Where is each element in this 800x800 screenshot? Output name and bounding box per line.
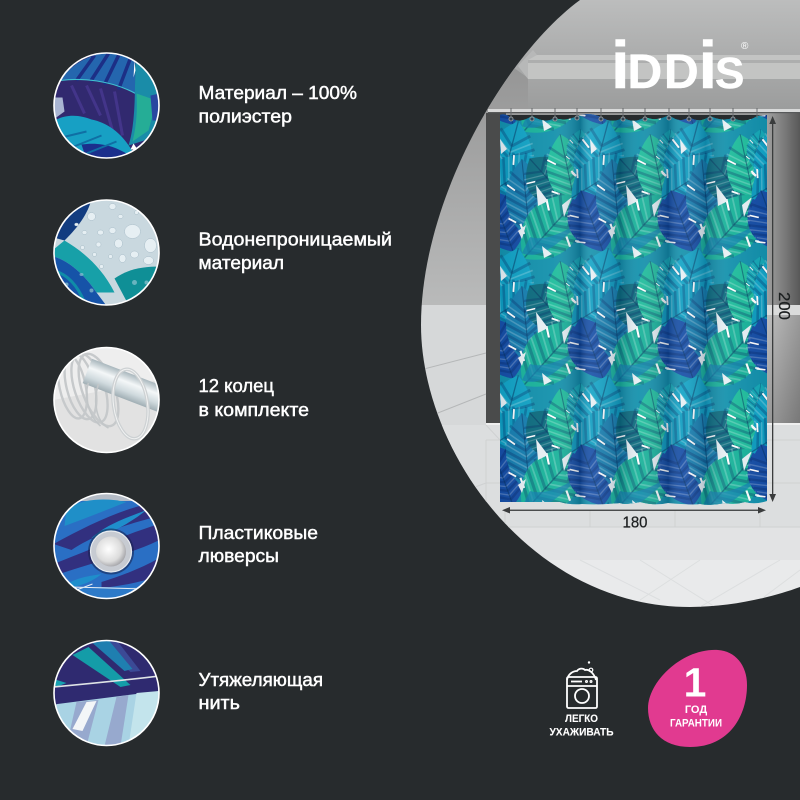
warranty badge xyxy=(648,650,747,747)
width dimension arrow xyxy=(502,507,766,514)
caption: weighted thread: Утяжеляющая xyxy=(198,670,323,690)
circle border xyxy=(54,494,159,598)
feature: waterproof xyxy=(54,200,392,308)
logo: IDDIS: D xyxy=(628,46,662,99)
shower rod xyxy=(488,109,800,113)
photo: plastic eyelet xyxy=(54,493,160,599)
height dimension arrow xyxy=(769,116,776,502)
dark recess behind curtain xyxy=(486,113,506,424)
ceiling cornice xyxy=(518,50,800,79)
photo: rings on rod xyxy=(53,346,160,454)
width label 180: 180 xyxy=(622,514,648,532)
feature: material xyxy=(54,51,357,162)
circle border xyxy=(54,348,159,452)
pink blob xyxy=(648,650,747,747)
warranty caption: ГАРАНТИИ xyxy=(670,718,722,730)
feature: weighted thread xyxy=(54,640,323,746)
photo: leaf fabric xyxy=(54,51,160,162)
caption: rings: в комплекте xyxy=(198,400,309,420)
caption: easy care: УХАЖИВАТЬ xyxy=(550,726,614,738)
white wall band xyxy=(767,305,800,315)
warranty number: 1 xyxy=(684,660,706,706)
bath front and floor xyxy=(420,423,800,610)
circle border xyxy=(54,640,159,746)
photo: water drops on fabric xyxy=(54,200,160,308)
feature: rings xyxy=(53,347,309,453)
caption: eyelets: Пластиковые xyxy=(198,523,318,543)
caption: material: полиэстер xyxy=(198,106,292,126)
logo: IDDIS: S xyxy=(715,49,744,98)
left side wall xyxy=(422,68,528,305)
photo: hem thread xyxy=(54,640,160,746)
circle border xyxy=(54,53,159,158)
shower curtain with tropical leaves xyxy=(500,114,767,505)
right side dark wall xyxy=(767,113,800,305)
logo: IDDIS: i xyxy=(698,28,717,103)
caption: easy care: ЛЕГКО xyxy=(565,713,598,725)
logo: IDDIS: i xyxy=(611,28,630,103)
right side lower wall xyxy=(767,315,800,425)
warranty caption: ГОД xyxy=(685,704,707,716)
circle border xyxy=(54,200,159,305)
feature: eyelets xyxy=(54,493,318,599)
logo registered mark: ® xyxy=(741,41,749,52)
left wall tiles xyxy=(420,305,486,505)
caption: material: Материал – 100% xyxy=(198,83,357,103)
caption: weighted thread: нить xyxy=(198,693,240,713)
panel: bathroom photo with curtain xyxy=(421,0,800,607)
height label 200: 200 xyxy=(775,292,792,320)
caption: waterproof: Водонепроницаемый xyxy=(198,230,392,250)
easy care badge xyxy=(550,661,614,738)
logo: IDDIS: D xyxy=(664,46,699,99)
curtain hooks and eyelets xyxy=(509,108,757,121)
caption: waterproof: материал xyxy=(198,253,284,273)
caption: eyelets: люверсы xyxy=(198,546,279,566)
icon: washing machine xyxy=(567,661,597,708)
caption: rings: 12 колец xyxy=(198,376,274,396)
upper wall xyxy=(484,0,800,115)
